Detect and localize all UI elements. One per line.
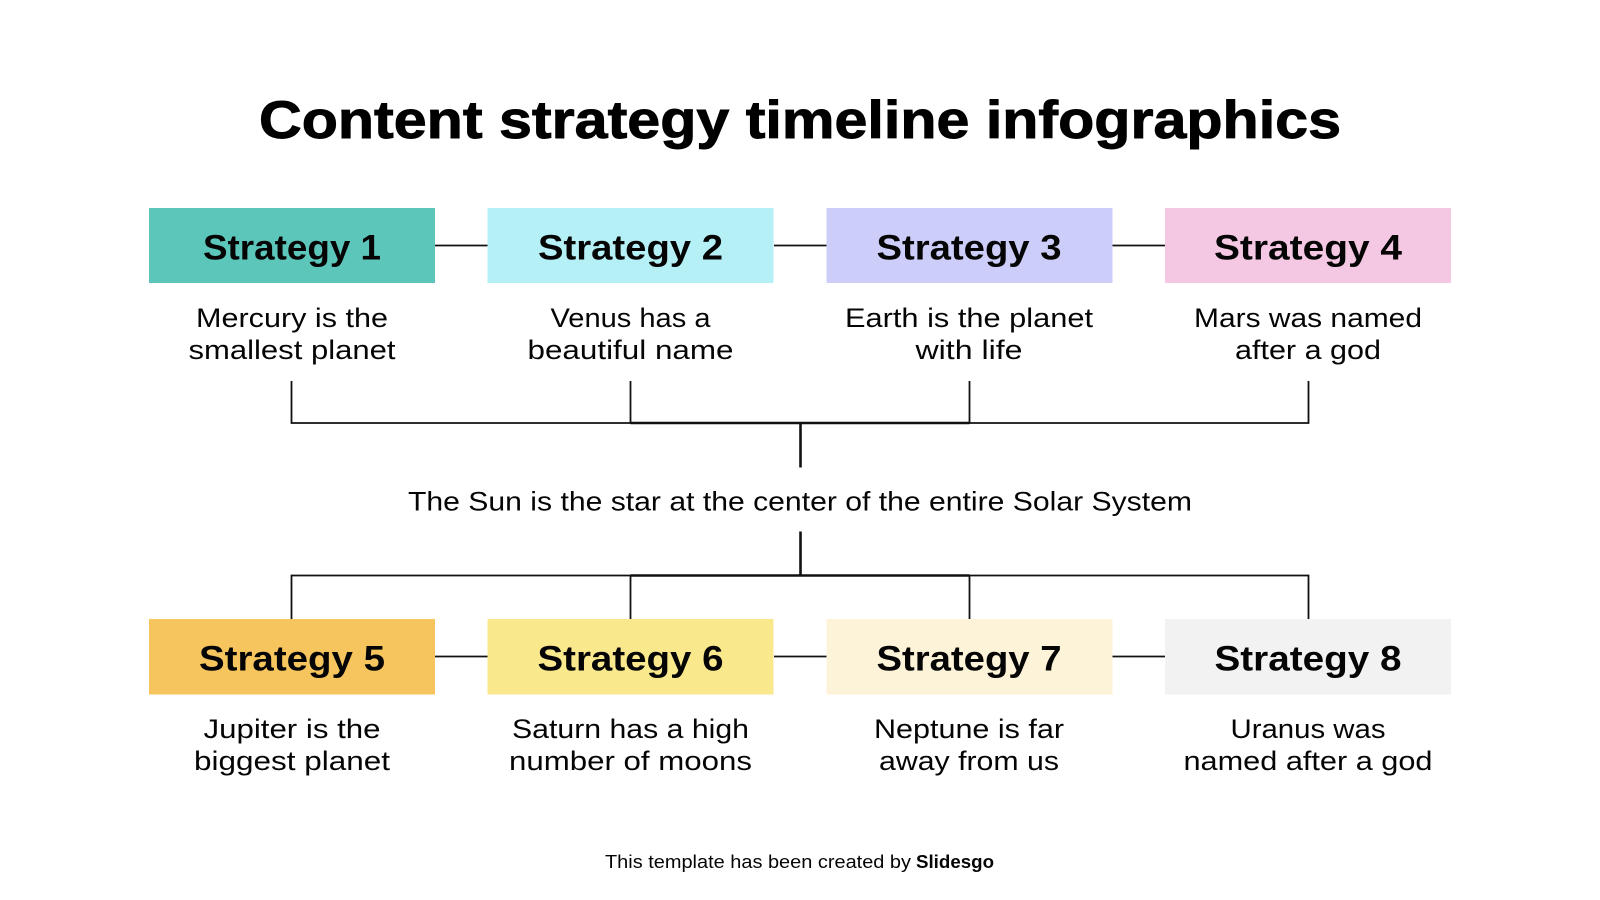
strategy 5 description: Jupiter is the xyxy=(204,714,380,744)
strategy 4 description: Mars was named xyxy=(1194,303,1422,333)
strategy 7 description: Neptune is far xyxy=(874,714,1064,744)
strategy 1 box xyxy=(149,208,435,283)
panel: strategy 2 xyxy=(488,208,774,365)
strategy 8 heading: Strategy 8 xyxy=(1214,640,1402,678)
panel: strategy 3 xyxy=(826,208,1112,365)
strategy 7 box xyxy=(826,619,1112,694)
strategy 5 description xyxy=(194,714,391,776)
strategy 2 description: beautiful name xyxy=(528,335,734,365)
lower bracket connector xyxy=(292,532,1308,619)
strategy 8 description: named after a god xyxy=(1184,746,1432,776)
strategy 3 description xyxy=(845,303,1094,365)
strategy 6 description xyxy=(509,714,752,776)
panel: strategy 8 xyxy=(1165,619,1451,776)
strategy 8 description: Uranus was xyxy=(1230,714,1386,744)
strategy 6 description: number of moons xyxy=(509,746,752,776)
strategy 5 heading: Strategy 5 xyxy=(199,640,385,678)
strategy 7 heading: Strategy 7 xyxy=(876,640,1062,678)
strategy 3 heading: Strategy 3 xyxy=(876,228,1062,268)
strategy 1 description xyxy=(188,303,396,365)
strategy 7 description xyxy=(874,714,1064,776)
central statement: The Sun is the star at the center of the entire Solar System xyxy=(408,486,1192,516)
strategy 2 description xyxy=(528,303,734,365)
strategy 1 description: Mercury is the xyxy=(196,303,388,333)
strategy 1 description: smallest planet xyxy=(188,335,396,365)
connectors: bottom row xyxy=(435,656,1165,658)
strategy 1 heading: Strategy 1 xyxy=(203,228,381,268)
strategy 6 description: Saturn has a high xyxy=(512,714,749,744)
strategy 3 description: Earth is the planet xyxy=(845,303,1094,333)
panel: strategy 1 xyxy=(149,208,435,365)
strategy 2 box xyxy=(488,208,774,283)
strategy 4 description: after a god xyxy=(1235,335,1381,365)
panel: strategy 7 xyxy=(826,619,1112,776)
strategy 2 heading: Strategy 2 xyxy=(538,228,723,268)
title: Content strategy timeline infographics xyxy=(259,91,1341,150)
strategy 3 box xyxy=(826,208,1112,283)
strategy 8 description xyxy=(1184,714,1432,776)
strategy 4 heading: Strategy 4 xyxy=(1214,228,1403,268)
panel: strategy 5 xyxy=(149,619,435,776)
strategy 6 box xyxy=(488,619,774,694)
footer credit: Slidesgo xyxy=(916,852,994,872)
strategy 2 description: Venus has a xyxy=(550,303,712,333)
strategy 8 box xyxy=(1165,619,1451,694)
connectors: top row xyxy=(435,244,1165,246)
strategy 3 description: with life xyxy=(914,335,1022,365)
panel: strategy 4 xyxy=(1165,208,1451,365)
upper bracket connector xyxy=(292,381,1308,468)
footer credit: This template has been created by xyxy=(605,852,911,872)
strategy 7 description: away from us xyxy=(879,746,1059,776)
panel: strategy 6 xyxy=(488,619,774,776)
strategy 4 box xyxy=(1165,208,1451,283)
strategy 5 description: biggest planet xyxy=(194,746,391,776)
strategy 4 description xyxy=(1194,303,1422,365)
strategy 6 heading: Strategy 6 xyxy=(538,640,724,678)
strategy 5 box xyxy=(149,619,435,694)
